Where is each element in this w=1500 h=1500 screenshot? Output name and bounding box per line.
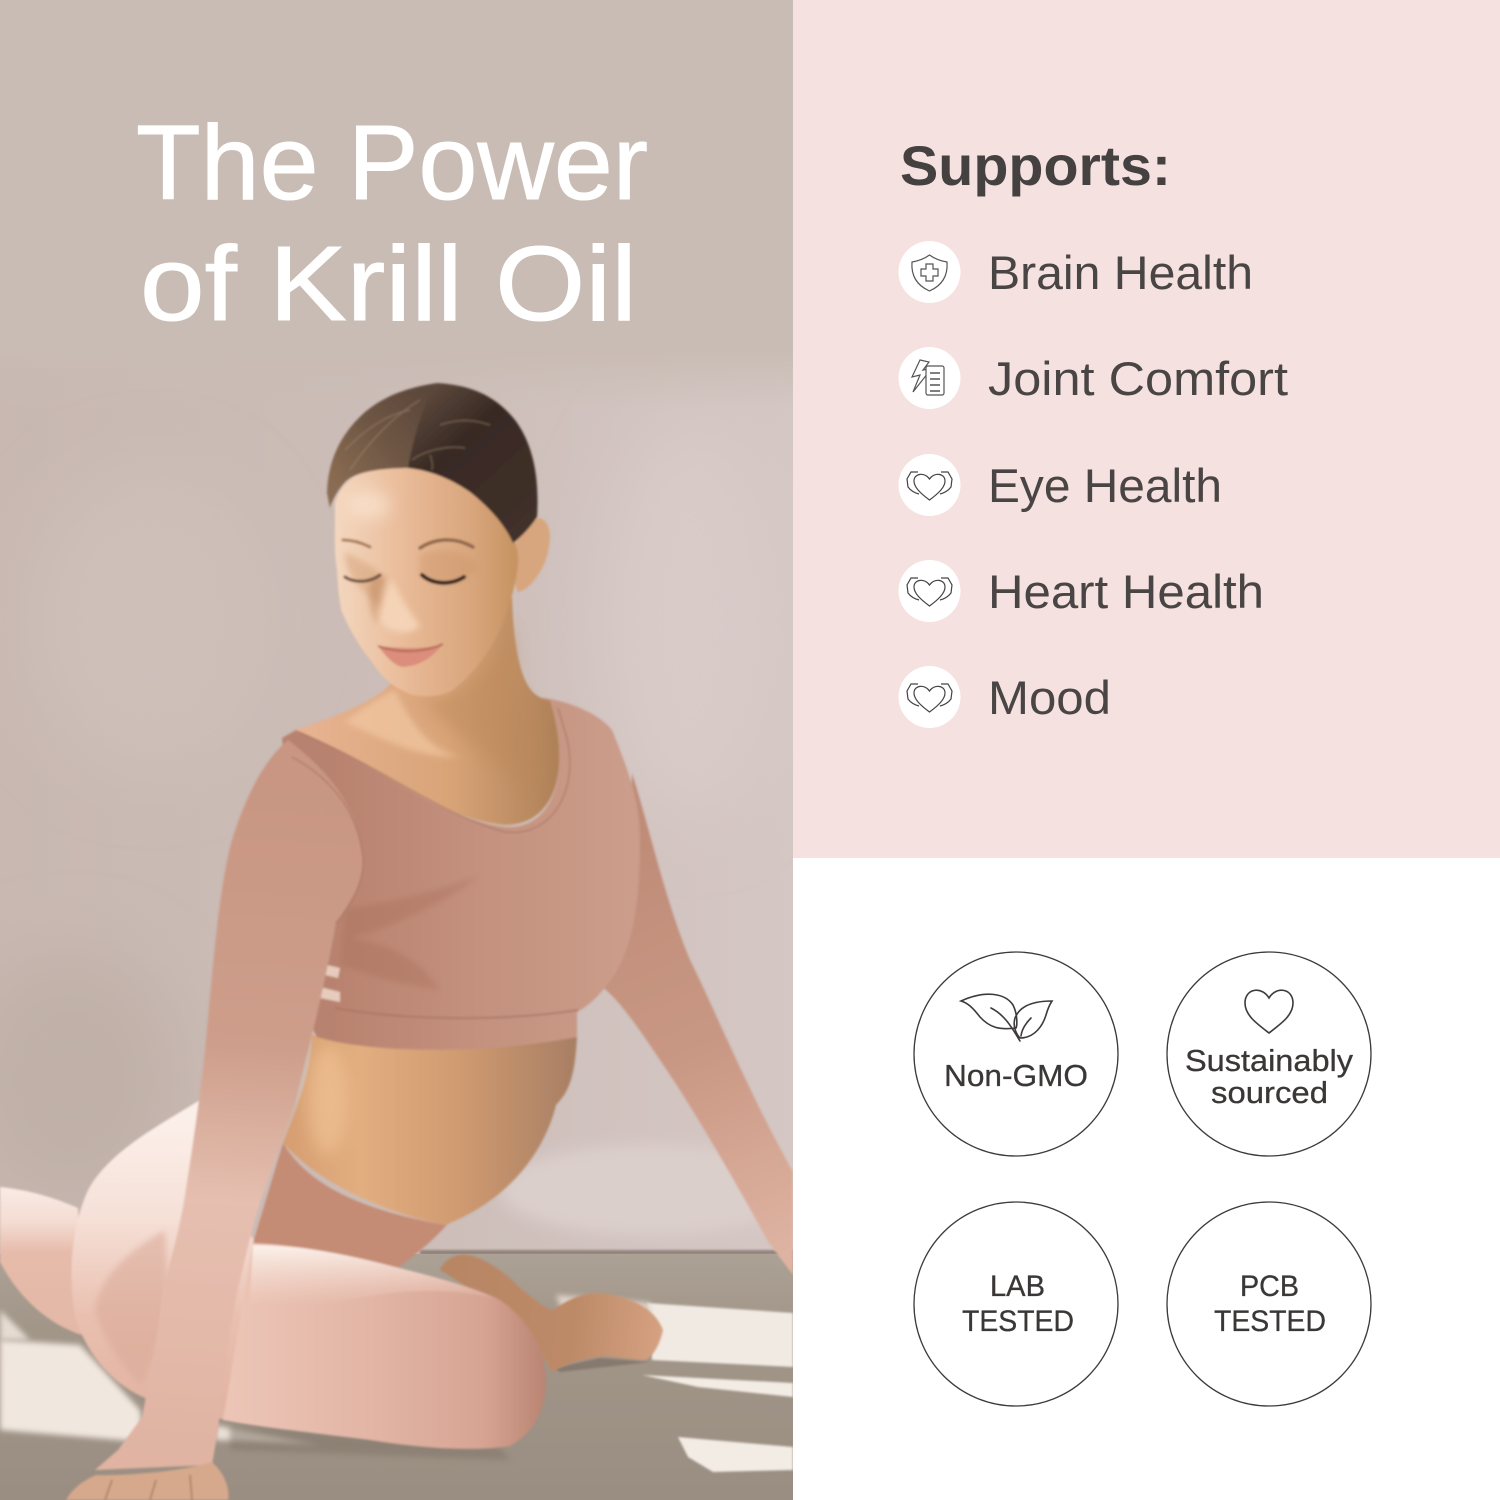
band line bbox=[335, 1008, 578, 1018]
heading: The Power of Krill Oil: The Power bbox=[136, 104, 648, 222]
badge: PCB tested: PCB bbox=[1240, 1270, 1299, 1303]
top band fade bbox=[530, 0, 793, 378]
head bbox=[335, 464, 518, 696]
right arm bbox=[600, 773, 793, 1275]
lips bbox=[378, 644, 443, 667]
eyebrows and lashes bbox=[343, 540, 473, 583]
briefs bbox=[253, 1143, 450, 1270]
foot bbox=[440, 1255, 663, 1372]
heading: The Power of Krill Oil bbox=[136, 104, 648, 343]
crop top body bbox=[282, 697, 640, 1050]
hair strands bbox=[345, 400, 490, 470]
badge: sustainably sourced bbox=[1167, 952, 1371, 1156]
panel: photo of woman stretching bbox=[0, 0, 800, 1500]
underarm folds bbox=[345, 884, 462, 987]
heading: The Power of Krill Oil: of Krill Oil bbox=[140, 225, 637, 343]
hip and thigh bbox=[72, 1100, 260, 1420]
eye socket shading bbox=[344, 551, 470, 606]
badge: non-GMO bbox=[914, 952, 1118, 1156]
badge: lab tested: LAB bbox=[990, 1270, 1045, 1303]
list item: brain health bbox=[898, 241, 1253, 303]
badge: lab tested bbox=[914, 1202, 1118, 1406]
badge: lab tested: TESTED bbox=[962, 1305, 1074, 1338]
panel: supports bbox=[793, 0, 1500, 858]
ear bbox=[513, 518, 550, 592]
main leg bbox=[223, 1243, 546, 1449]
badge: sustainably sourced: Sustainably bbox=[1185, 1043, 1354, 1078]
badge: PCB tested: TESTED bbox=[1214, 1305, 1326, 1338]
list item: brain health: Brain Health bbox=[988, 246, 1253, 299]
nose shadow bbox=[369, 575, 386, 625]
sleeve seam bbox=[292, 757, 363, 923]
list item: mood bbox=[898, 666, 1111, 728]
wall bbox=[0, 355, 793, 1254]
heading: supports: Supports: bbox=[900, 134, 1171, 197]
icon: heart bbox=[1245, 990, 1293, 1033]
chest highlight bbox=[348, 691, 452, 758]
torso side gaps bbox=[320, 964, 342, 1003]
list item: joint comfort: Joint Comfort bbox=[988, 352, 1288, 405]
list item: mood: Mood bbox=[988, 671, 1111, 724]
list item: heart health bbox=[898, 560, 1264, 622]
list item: joint comfort bbox=[898, 347, 1288, 409]
midriff bbox=[283, 1035, 577, 1225]
badge: PCB tested bbox=[1167, 1202, 1371, 1406]
floor bbox=[0, 1254, 793, 1500]
woman figure bbox=[0, 383, 793, 1500]
list item: eye health bbox=[898, 454, 1222, 516]
thigh highlight bbox=[251, 1244, 488, 1296]
neckline trim bbox=[328, 709, 570, 834]
hair left of part bbox=[327, 383, 437, 508]
forehead highlight bbox=[346, 491, 390, 519]
badge: sustainably sourced: sourced bbox=[1211, 1075, 1328, 1110]
hip fold shading bbox=[95, 1230, 170, 1385]
neck shadow bbox=[430, 634, 522, 752]
list item: eye health: Eye Health bbox=[988, 459, 1222, 512]
fingers bbox=[105, 1475, 192, 1500]
nose bbox=[380, 580, 420, 632]
badge: non-GMO: Non-GMO bbox=[944, 1058, 1088, 1093]
left sleeve bbox=[95, 740, 363, 1470]
neck and chest bbox=[295, 597, 559, 825]
hand bbox=[66, 1462, 228, 1500]
back leg bbox=[0, 1187, 82, 1335]
midriff highlight bbox=[308, 1045, 348, 1155]
list item: heart health: Heart Health bbox=[988, 565, 1264, 618]
hair right of part bbox=[408, 383, 538, 543]
icon: leaves bbox=[961, 994, 1052, 1041]
